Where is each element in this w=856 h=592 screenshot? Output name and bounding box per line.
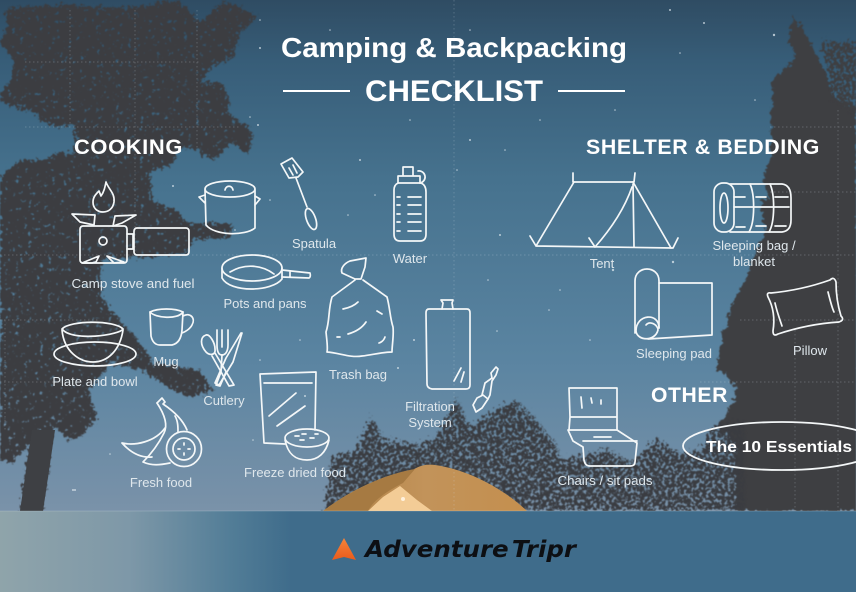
- label: plate and bowl: Plate and bowl: [52, 374, 138, 389]
- label: freeze dried food: Freeze dried food: [244, 465, 346, 480]
- tree silhouette: left and top left: [0, 0, 257, 510]
- icon: pan: [222, 255, 310, 289]
- tree trunk: [20, 430, 55, 511]
- label: sleeping bag / blanket: [712, 238, 796, 269]
- label: cutlery: Cutlery: [203, 393, 245, 408]
- icon: water filtration system: [426, 300, 498, 412]
- icon: cutlery: [202, 330, 242, 386]
- heading: cooking: COOKING: [74, 136, 183, 159]
- label: pots and pans: Pots and pans: [223, 296, 307, 311]
- heading: other: OTHER: [651, 384, 728, 407]
- icon: fresh food: [122, 398, 202, 466]
- label: mug: Mug: [153, 354, 179, 369]
- icon: water bottle: [394, 167, 426, 241]
- title block: [281, 32, 627, 108]
- icon: trash bag: [326, 258, 393, 356]
- label: chairs and sit pads: Chairs / sit pads: [558, 473, 653, 488]
- icon: sleeping bag: [714, 183, 791, 232]
- title: Camping & Backpacking: Camping & Backpacking: [281, 32, 627, 63]
- label: spatula: Spatula: [292, 236, 337, 251]
- icon: mug: [150, 309, 193, 345]
- icon: freeze dried food: [260, 372, 329, 460]
- label: filtration system: Filtration: [405, 399, 455, 414]
- label: sleeping bag / blanket: Sleeping bag /: [712, 238, 796, 253]
- callout: the 10 essentials: [683, 422, 856, 470]
- icon: plate and bowl: [54, 322, 136, 366]
- label: pillow: Pillow: [793, 343, 828, 358]
- label: water: Water: [393, 251, 428, 266]
- sparse branches: right tree: [822, 42, 856, 115]
- panel: other: [558, 384, 856, 488]
- logo mark: [332, 538, 356, 560]
- logo: AdventureTripr: [332, 537, 578, 563]
- footer band: [0, 511, 856, 592]
- label: fresh food: Fresh food: [130, 475, 192, 490]
- label: sleeping pad: Sleeping pad: [636, 346, 712, 361]
- lit tent dome: [323, 465, 527, 511]
- panel: shelter and bedding: [530, 136, 843, 361]
- icon: tent: [530, 173, 678, 248]
- label: filtration system: [405, 399, 455, 430]
- tree silhouette: bottom forest: [325, 400, 745, 511]
- panel: cooking: [52, 136, 498, 490]
- icon: sleeping pad: [635, 269, 712, 339]
- icon: pillow: [767, 278, 843, 335]
- stars: [72, 9, 775, 491]
- icon: spatula: [281, 158, 319, 231]
- icon: chair sit pad: [568, 388, 637, 466]
- label: camp stove and fuel: Camp stove and fuel: [72, 276, 195, 291]
- icon: camp stove and fuel: [72, 182, 189, 263]
- label: filtration system: System: [408, 415, 452, 430]
- subtitle rules: [283, 90, 625, 92]
- tree silhouette: right: [717, 0, 856, 511]
- callout: the 10 essentials: The 10 Essentials: [706, 439, 852, 456]
- label: trash bag: Trash bag: [329, 367, 387, 382]
- label: sleeping bag / blanket: blanket: [733, 254, 775, 269]
- label: tent: Tent: [590, 256, 615, 271]
- logo wordmark: Adventure Tripr: [363, 537, 578, 563]
- heading: shelter and bedding: SHELTER & BEDDING: [586, 136, 820, 159]
- subtitle: Checklist: CHECKLIST: [365, 75, 543, 108]
- icon: pot: [199, 181, 260, 234]
